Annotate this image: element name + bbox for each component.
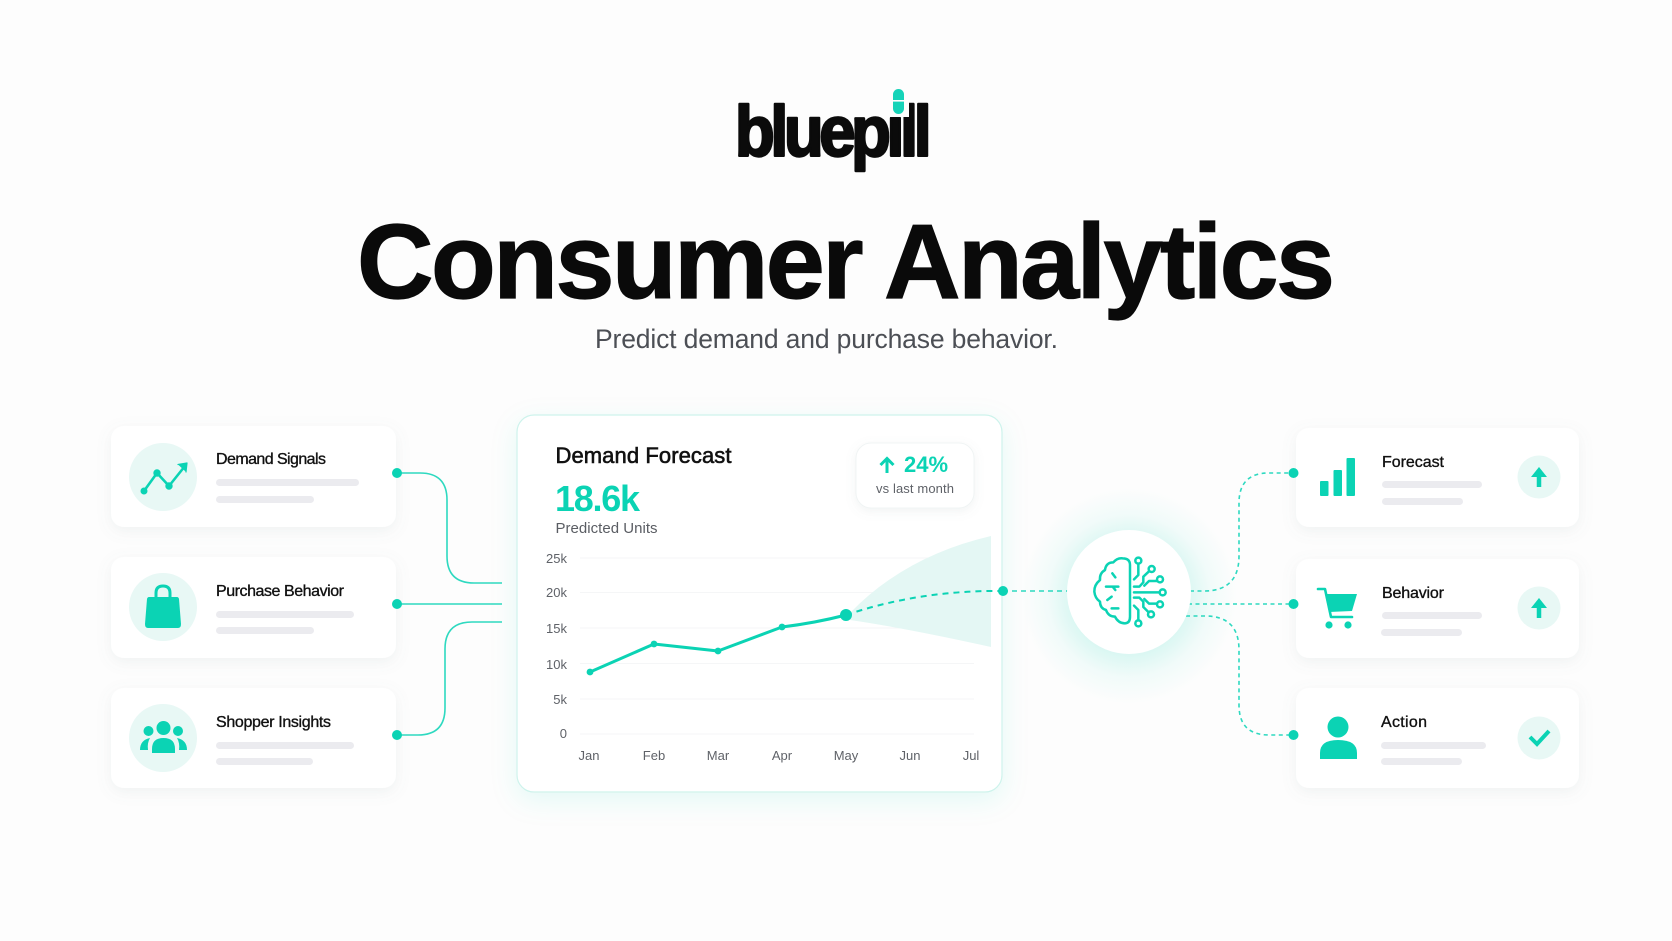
connectors: output dashed lines [1186, 473, 1293, 735]
logo: bluepill: bluepill [735, 93, 932, 172]
badge: 24% vs last month [856, 443, 974, 508]
output connector dots [1288, 468, 1298, 740]
x axis labels: May [834, 748, 859, 763]
icon: shopping bag [145, 586, 181, 628]
card: Demand Signals: Demand Signals [216, 451, 326, 468]
card: Shopper Insights [111, 688, 396, 788]
icon: group of people [140, 721, 187, 753]
connector dot and dashed link to brain [998, 586, 1070, 596]
y axis labels: 5k [553, 692, 567, 707]
y axis labels: 15k [546, 621, 567, 636]
card: Demand Signals [111, 426, 396, 527]
input connector dots [392, 468, 402, 740]
y axis labels: 0 [560, 726, 567, 741]
x axis labels: Feb [643, 748, 665, 763]
y axis labels: 25k [546, 551, 567, 566]
metric: 18.6k: 18.6k [555, 478, 641, 519]
actual data line [590, 615, 846, 672]
y axis labels: 10k [546, 657, 567, 672]
x axis labels: Jul [963, 748, 979, 763]
status: up arrow [1518, 586, 1560, 630]
card: Purchase Behavior: Purchase Behavior [216, 583, 345, 600]
y axis labels [546, 551, 567, 741]
x axis labels: Jan [579, 748, 599, 763]
forecast confidence cone [850, 536, 991, 647]
badge: 24% vs last month: vs last month [876, 481, 954, 496]
card: Behavior: Behavior [1382, 585, 1445, 602]
card: Forecast: Forecast [1382, 454, 1445, 471]
title: Consumer Analytics [357, 203, 1335, 321]
x axis labels [579, 748, 979, 763]
card: Forecast [1296, 428, 1579, 527]
icon: brain with circuits [1094, 558, 1166, 626]
card: Shopper Insights: Shopper Insights [216, 714, 331, 731]
icon: shopping cart [1318, 589, 1357, 629]
status: check [1518, 716, 1560, 760]
card: Purchase Behavior [111, 557, 396, 658]
icon: person [1320, 716, 1357, 759]
metric label: Predicted Units [556, 520, 658, 537]
card: Behavior [1296, 559, 1579, 658]
x axis labels: Mar [707, 748, 730, 763]
subtitle: Predict demand and purchase behavior. [595, 324, 1058, 354]
icon: trend line [142, 463, 187, 493]
status: up arrow [1518, 456, 1560, 498]
x axis labels: Apr [772, 748, 793, 763]
panel heading: Demand Forecast [556, 443, 732, 468]
x axis labels: Jun [900, 748, 920, 763]
connectors: input solid lines [397, 473, 502, 735]
card: Action [1296, 688, 1579, 788]
badge: 24% vs last month: 24% [904, 452, 948, 477]
forecast dashed line [846, 591, 1003, 615]
card: Action: Action [1381, 714, 1427, 731]
y axis labels: 20k [546, 585, 567, 600]
brain node [1021, 488, 1237, 704]
line chart [546, 536, 1003, 763]
icon: bar chart [1320, 458, 1355, 496]
panel: demand forecast [517, 415, 1003, 792]
